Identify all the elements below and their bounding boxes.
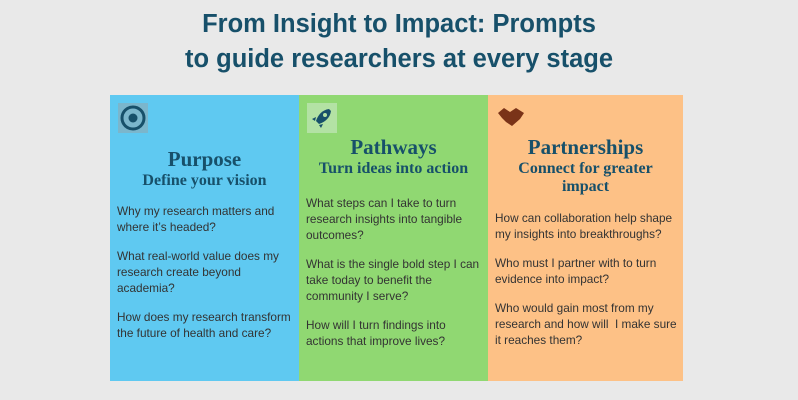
questions: pathways: How will I turn findings into actions that improve lives? — [306, 318, 446, 348]
heading: partnerships — [518, 135, 653, 195]
questions: purpose — [117, 204, 291, 340]
heading: pathways: Pathways — [350, 135, 437, 159]
panel: pathways — [299, 95, 488, 381]
questions: partnerships: Who would gain most from my research and how will I make sure it reaches them? — [495, 301, 677, 347]
questions: partnerships: Who must I partner with to turn evidence into impact? — [495, 256, 656, 286]
heading: partnerships: impact — [562, 178, 609, 195]
questions: purpose: Why my research matters and where it’s headed? — [117, 204, 274, 234]
questions: partnerships — [495, 211, 677, 347]
questions: pathways: What is the single bold step I can take today to benefit the community I serve? — [306, 257, 479, 303]
heading: partnerships: Partnerships — [528, 135, 643, 159]
heading: partnerships: Connect for greater — [518, 160, 653, 177]
questions: pathways: What steps can I take to turn research insights into tangible outcomes? — [306, 196, 462, 242]
icon: handshake — [498, 108, 524, 126]
heading: purpose — [142, 147, 267, 189]
questions: partnerships: How can collaboration help shape my insights into breakthroughs? — [495, 211, 672, 241]
icon: rocket — [307, 103, 337, 133]
heading: pathways — [319, 135, 468, 177]
panel: purpose — [110, 95, 299, 381]
heading: pathways: Turn ideas into action — [319, 160, 468, 177]
heading: purpose: Define your vision — [142, 172, 267, 189]
panel: partnerships — [488, 95, 683, 381]
title — [185, 10, 613, 73]
title: From Insight to Impact: Prompts — [202, 10, 596, 38]
questions: purpose: How does my research transform the future of health and care? — [117, 310, 291, 340]
icon: target — [118, 103, 148, 133]
title: to guide researchers at every stage — [185, 45, 613, 73]
questions: purpose: What real-world value does my research create beyond academia? — [117, 249, 279, 295]
questions: pathways — [306, 196, 479, 348]
heading: purpose: Purpose — [168, 147, 241, 171]
